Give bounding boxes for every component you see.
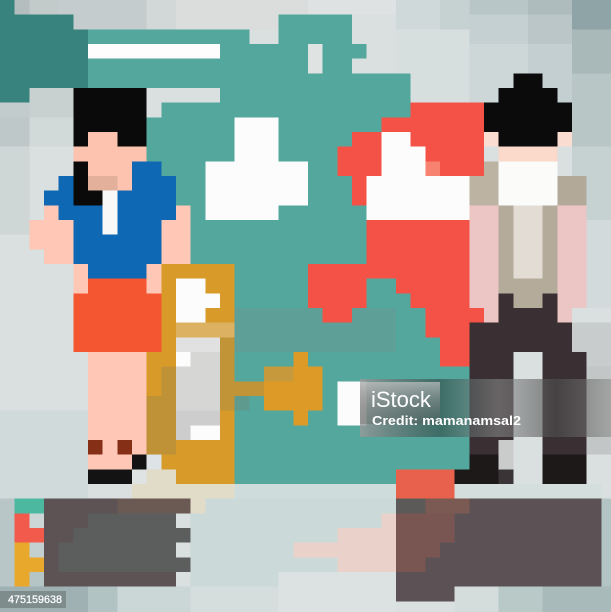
watermark tint on teal (235, 308, 396, 352)
left dark text block (44, 499, 191, 587)
shoes (455, 455, 499, 484)
coral shape (308, 103, 484, 367)
white square (337, 381, 367, 425)
black neck hair (73, 161, 103, 205)
white window in frame (176, 279, 220, 323)
iStock logo text: iStock (371, 387, 432, 412)
watermark band (360, 379, 611, 437)
small light window (308, 44, 323, 73)
gray inner panel (176, 337, 220, 440)
white bar (88, 44, 220, 59)
hair (73, 88, 147, 147)
main teal map shape (88, 15, 469, 484)
hair (484, 73, 572, 147)
orange skirt (73, 279, 161, 352)
pink sleeves (469, 205, 499, 308)
black shoes (132, 455, 147, 469)
white stair shape in coral (367, 132, 469, 220)
left legend color blocks (15, 499, 44, 587)
legs (88, 352, 147, 455)
man figure (455, 73, 587, 484)
arms (29, 205, 73, 264)
image id label: 475159638 (8, 594, 62, 606)
woman figure (29, 88, 191, 484)
white shirt (499, 161, 557, 205)
hips skin (73, 264, 88, 293)
face (73, 132, 147, 191)
chin shadow (88, 176, 117, 191)
pale coral cell (425, 161, 440, 176)
cream shadow (132, 469, 235, 513)
blue top (44, 161, 176, 279)
white shirt (103, 191, 117, 235)
vest (499, 205, 557, 308)
white plus shape (205, 117, 308, 220)
right dark block (396, 499, 601, 601)
shoulders (469, 161, 499, 205)
face (484, 132, 499, 147)
credit text: Credit: mamanamsal2 (372, 413, 521, 428)
dark teal corner block (0, 0, 88, 103)
brown socks (88, 440, 103, 455)
image id label (0, 591, 66, 608)
dark trousers (469, 293, 587, 455)
gold arrow (220, 352, 323, 425)
gold frame (147, 264, 235, 484)
coral tab (396, 469, 455, 499)
pink band (293, 513, 396, 572)
